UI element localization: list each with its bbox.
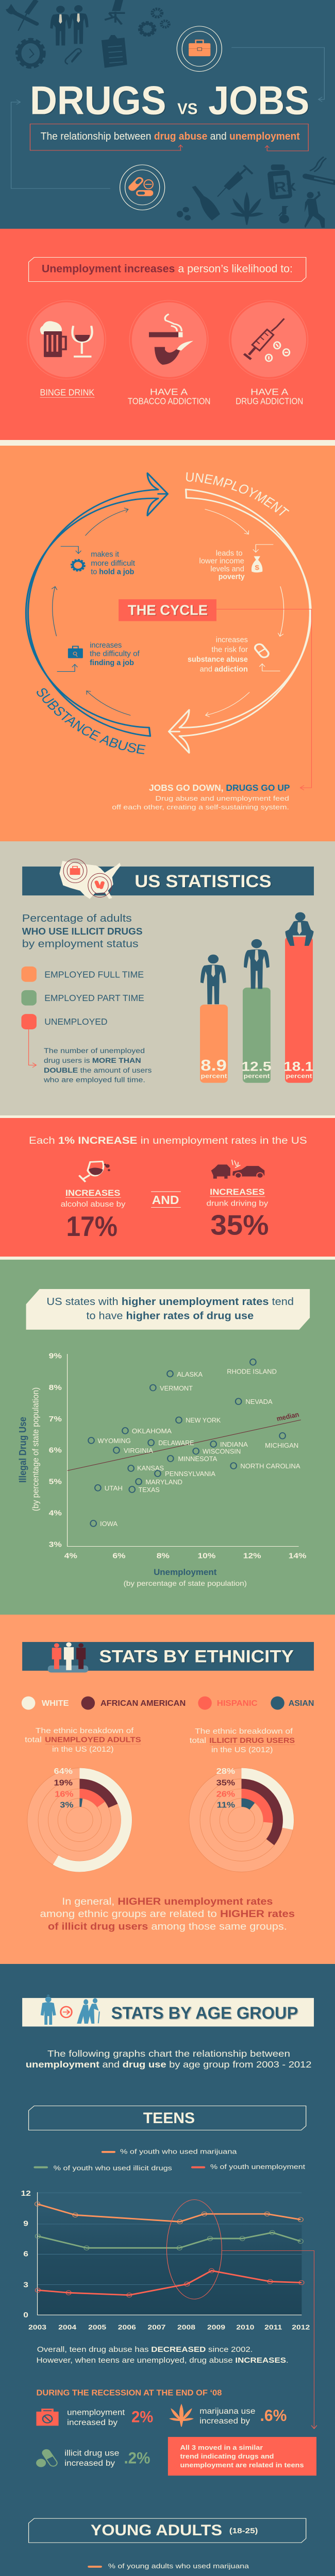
chart: scatter plot: 4% (49, 1509, 62, 1517)
callout: US states banner (26, 1289, 310, 1330)
text: intro: The following graphs chart the relationship between (47, 2049, 290, 2059)
label: median: median (276, 1411, 300, 1423)
stat: teen marijuana: .6% (260, 2407, 287, 2425)
text block: in general: of illicit drug users among those same groups. (48, 1921, 287, 1932)
label: y axis (17, 1387, 41, 1511)
stat: teen marijuana: marijuana use (199, 2406, 255, 2415)
chart: scatter plot: MICHIGAN (265, 1442, 298, 1449)
subtitle box: The relationship between drug abuse and unemployment (41, 130, 300, 142)
chart: scatter plot: 14% (289, 1552, 307, 1560)
chart: teens line chart: 2012 (292, 2324, 310, 2331)
callout: US states banner: US states with higher unemployment rates tend (46, 1296, 294, 1308)
stat: teen illicit drugs: .2% (124, 2449, 150, 2467)
text: hold a job (71, 550, 136, 576)
text: lower income: lower income (199, 557, 244, 565)
chart: unemployed adults rings: 3% (60, 1801, 74, 1809)
callout: US states banner: to have higher rates of drug use (86, 1310, 254, 1321)
text: lower income (199, 549, 262, 581)
heading: each 1 percent: Each 1% INCREASE in unemployment rates in the US (29, 1135, 307, 1146)
stat: drunk driving: drunk driving by (206, 1199, 269, 1208)
legend: employment status (21, 967, 144, 1029)
text: illicit drug users heading: The ethnic breakdown of (195, 1727, 293, 1736)
chart: teens line chart: 2009 (207, 2324, 225, 2331)
text block: in general: In general, HIGHER unemployment rates (62, 1896, 273, 1907)
legend: teens: % of youth who used marijuana (120, 2148, 237, 2156)
title (30, 78, 309, 123)
text: substance abuse risk: and addiction (200, 665, 248, 673)
legend: employment status: UNEMPLOYED (44, 1018, 108, 1027)
stat: teen unemployment: unemployment (67, 2408, 125, 2417)
icon: drugs cluster: Rx (273, 177, 297, 196)
bar chart: drug use by employment (200, 912, 314, 1083)
arrows inner (53, 509, 284, 715)
text: jobs go down: Drug abuse and unemployment feed (155, 795, 289, 803)
heading: stats by ethnicity: STATS BY ETHNICITY (99, 1646, 294, 1666)
chart: unemployed adults rings (27, 1767, 132, 1872)
text: substance abuse risk (188, 636, 270, 673)
stat: teen unemployment: increased by (67, 2418, 118, 2427)
chart: scatter plot: UTAH (105, 1484, 123, 1492)
chart: scatter plot: WYOMING (97, 1437, 131, 1445)
callout: the cycle (119, 599, 311, 788)
chart: illicit drug users rings: 35% (216, 1778, 235, 1787)
chart: scatter plot: 4% (64, 1552, 77, 1560)
panel: US statistics (21, 859, 314, 1084)
text: illicit drug users heading: in the US (2012) (211, 1745, 273, 1754)
text: unemployed adults heading: UNEMPLOYED ADULTS (45, 1736, 141, 1744)
callout: teens (168, 2437, 316, 2476)
bar chart: drug use by employment: percent (286, 1073, 312, 1079)
chart: scatter plot: 10% (197, 1552, 215, 1560)
icon: binge drink: BINGE DRINK (40, 388, 94, 398)
heading: teens: TEENS (143, 2109, 195, 2126)
heading: US statistics banner (22, 859, 314, 899)
label: y axis: Illegal Drug Use (17, 1417, 28, 1483)
chart: illicit drug users rings: 28% (216, 1767, 235, 1776)
chart: scatter plot: 8% (157, 1552, 170, 1560)
chart: scatter plot: 3% (49, 1540, 62, 1549)
chart: teens line chart: 3 (23, 2281, 28, 2289)
chart: teens line chart: 0 (23, 2311, 28, 2319)
text: lower income: levels and (210, 565, 244, 573)
stat: teen illicit drugs (36, 2448, 150, 2468)
panel: stats by ethnicity (22, 1642, 314, 1672)
heading: stats by age group: STATS BY AGE GROUP (111, 2003, 298, 2023)
text block: percentage of adults (22, 912, 143, 950)
bar chart: drug use by employment: 18.1 (283, 1059, 313, 1074)
text block: percentage of adults: Percentage of adults (22, 912, 132, 924)
bar chart: drug use by employment: percent (201, 1073, 227, 1079)
chart: unemployed adults rings: 64% (54, 1767, 73, 1776)
text: hold a job: makes it (91, 550, 119, 558)
text: teen summary: However, when teens are unemployed, drug abuse INCREASES. (36, 2356, 289, 2365)
chart: scatter plot: VIRGINIA (124, 1447, 154, 1454)
connector lines (11, 47, 324, 189)
text: finding a job (68, 641, 140, 667)
stat: alcohol abuse: 17% (66, 1211, 118, 1242)
chart: teens line chart: 2011 (264, 2324, 282, 2331)
subtitle box (30, 124, 308, 151)
chart: scatter plot: NORTH CAROLINA (240, 1462, 300, 1470)
text: intro: unemployment and drug use by age group from 2003 - 2012 (26, 2060, 311, 2070)
text: substance abuse risk: substance abuse (188, 655, 248, 664)
text: teen summary (36, 2345, 289, 2365)
text: lower income: poverty (219, 572, 245, 581)
label: x axis: (by percentage of state population) (124, 1580, 247, 1588)
stat: drunk driving: INCREASES (210, 1187, 265, 1197)
panel: likelihood icons (25, 300, 311, 754)
chart: scatter plot: NEW YORK (186, 1416, 221, 1424)
icon: pills rings (120, 165, 165, 210)
icon: drug addiction: DRUG ADDICTION (236, 397, 303, 406)
chart: teens line chart: 6 (23, 2250, 28, 2258)
chart: scatter plot: KANSAS (137, 1464, 164, 1472)
icon: job tools cluster (7, 0, 169, 67)
icon: tobacco addiction: TOBACCO ADDICTION (128, 397, 210, 406)
stat: teen marijuana: increased by (199, 2416, 250, 2425)
callout: teens: trend indicating drugs and (180, 2453, 274, 2460)
chart: scatter plot: WISCONSIN (203, 1448, 241, 1455)
text: jobs go down (112, 783, 290, 811)
text: lower income: leads to (216, 549, 243, 557)
text: unemployed adults heading: The ethnic breakdown of (36, 1726, 134, 1735)
label: y axis: (by percentage of state population) (31, 1387, 41, 1511)
heading: unemployment curved: UNEMPLOYMENT (186, 472, 290, 516)
legend: ethnicity: WHITE (42, 1699, 69, 1708)
stat: teen illicit drugs: increased by (64, 2459, 115, 2468)
heading: young adults (29, 2518, 306, 2543)
text: unemployed adults heading: in the US (2012) (52, 1745, 114, 1754)
callout: more than double: drug users is MORE THAN (44, 1057, 141, 1065)
title: JOBS (208, 78, 309, 123)
stat: alcohol abuse: INCREASES (65, 1188, 120, 1198)
stat: teen illicit drugs: illicit drug use (64, 2449, 119, 2458)
text: illicit drug users heading: total (190, 1736, 206, 1744)
arrow: substance abuse arc (26, 473, 167, 736)
legend: ethnicity: AFRICAN AMERICAN (100, 1699, 186, 1708)
icon: tobacco addiction (128, 300, 210, 406)
text: illicit drug users heading: ILLICIT DRUG USERS (209, 1736, 295, 1744)
text: lower income: $ (255, 564, 259, 572)
icon: drug addiction (229, 300, 308, 406)
bar chart: drug use by employment: 8.9 (200, 1057, 227, 1074)
text: jobs go down: JOBS GO DOWN, DRUGS GO UP (149, 783, 290, 793)
stat: drunk driving (206, 1187, 269, 1241)
chart: scatter plot: 12% (243, 1552, 261, 1560)
heading: teens (29, 2106, 306, 2130)
chart: scatter plot: MINNESOTA (178, 1455, 217, 1463)
text block: in general (40, 1896, 295, 1932)
callout: more than double (29, 1029, 152, 1084)
panel: ethnicity charts (22, 1697, 314, 1932)
chart: illicit drug users rings (189, 1767, 294, 1872)
chart: scatter plot: 6% (49, 1446, 62, 1454)
chart: scatter plot: MARYLAND (145, 1478, 182, 1486)
chart: teens line chart: 2006 (118, 2324, 136, 2331)
chart: unemployed adults rings: 16% (55, 1790, 74, 1799)
chart: scatter plot: IOWA (100, 1520, 118, 1528)
chart: scatter plot: INDIANA (220, 1440, 248, 1448)
text block: percentage of adults: by employment status (22, 938, 139, 950)
label: x axis (124, 1567, 247, 1588)
chart: illicit drug users rings: 11% (217, 1801, 235, 1809)
text: teen summary: Overall, teen drug abuse has DECREASED since 2002. (37, 2345, 253, 2354)
callout: more than double: DOUBLE the amount of users (44, 1066, 152, 1074)
legend: ethnicity: HISPANIC (217, 1699, 258, 1708)
icon: tobacco addiction: HAVE A (150, 387, 188, 397)
text: hold a job: to hold a job (91, 568, 134, 576)
icon: drug addiction: HAVE A (250, 387, 289, 397)
icon: binge drink (27, 300, 106, 398)
icon: briefcase rings (177, 26, 222, 72)
heading: substance abuse curved: SUBSTANCE ABUSE (37, 688, 145, 754)
panel: stats by age group (21, 1994, 314, 2429)
text block: in general: among ethnic groups are related to HIGHER rates (40, 1908, 295, 1919)
text: finding a job: the difficulty of (90, 650, 140, 658)
callout: the cycle: THE CYCLE (128, 603, 208, 618)
callout: likelihood banner: Unemployment increases a person’s likelihood to: (42, 262, 293, 275)
text: intro (26, 2049, 311, 2070)
hero panel (7, 0, 335, 281)
chart: scatter plot: DELAWARE (158, 1439, 194, 1447)
callout: more than double: The number of unemployed (44, 1047, 145, 1055)
bar chart: drug use by employment: 12.5 (241, 1059, 272, 1074)
heading: recession teens: DURING THE RECESSION AT THE END OF ‘08 (36, 2388, 222, 2397)
stat: teen marijuana (169, 2404, 287, 2427)
text: substance abuse risk: increases (216, 636, 248, 644)
stat: teen unemployment: 2% (131, 2408, 153, 2426)
text: jobs go down: off each other, creating a self-sustaining system. (112, 804, 289, 811)
icon: drugs cluster (177, 157, 335, 228)
chart: teens line chart: 2010 (236, 2324, 254, 2331)
icon: spilled wine (79, 1161, 110, 1182)
chart: teens line chart: 2005 (88, 2324, 106, 2331)
chart: scatter plot: ALASKA (177, 1370, 203, 1378)
title: DRUGS (30, 78, 166, 123)
text: finding a job: finding a job (90, 658, 134, 667)
legend: young adults: % of young adults who used marijuana (108, 2563, 249, 2570)
chart: scatter plot (17, 1352, 307, 1588)
chart: scatter plot: 8% (49, 1383, 62, 1392)
callout: teens: unemployment are related in teens (180, 2462, 304, 2469)
legend: ethnicity: ASIAN (289, 1699, 314, 1708)
chart: scatter plot: OKLAHOMA (132, 1427, 172, 1435)
chart: illicit drug users rings: 26% (216, 1790, 235, 1799)
legend: employment status: EMPLOYED PART TIME (44, 994, 144, 1004)
heading: young adults: (18-25) (229, 2527, 258, 2535)
heading: US statistics banner: US STATISTICS (135, 871, 272, 891)
callout: likelihood banner (29, 257, 306, 281)
chart: teens line chart: 2004 (58, 2324, 77, 2331)
panel: cycle lower (68, 599, 311, 811)
chart: scatter plot: PENNSYLVANIA (165, 1470, 216, 1478)
chart: teens line chart (21, 2189, 314, 2429)
chart: teens line chart: 2008 (177, 2324, 195, 2331)
chart: the cycle (25, 472, 311, 754)
text block: percentage of adults: WHO USE ILLICIT DRUGS (22, 926, 143, 937)
arrow: unemployment arc (169, 489, 311, 753)
text: unemployed adults heading: total (25, 1736, 42, 1744)
bar chart: drug use by employment: percent (243, 1073, 270, 1079)
stat: teen unemployment (36, 2408, 153, 2427)
text: hold a job: more difficult (91, 559, 136, 568)
legend: employment status: EMPLOYED FULL TIME (44, 970, 144, 980)
text: and: AND (152, 1194, 179, 1207)
chart: scatter plot: 6% (112, 1552, 126, 1560)
legend: teens (35, 2148, 305, 2172)
chart: scatter plot: RHODE ISLAND (227, 1368, 277, 1375)
label: x axis: Unemployment (154, 1567, 216, 1577)
stat: alcohol abuse (61, 1188, 126, 1242)
chart: teens line chart: 12 (21, 2189, 31, 2197)
chart: scatter plot: NEVADA (245, 1398, 273, 1405)
stat: alcohol abuse: alcohol abuse by (61, 1200, 126, 1209)
chart: scatter plot: TEXAS (139, 1486, 160, 1494)
chart: scatter plot: 9% (49, 1352, 62, 1360)
chart: scatter plot: 5% (49, 1478, 62, 1486)
chart: scatter plot: 7% (49, 1415, 62, 1423)
text: illicit drug users heading (190, 1727, 295, 1754)
chart: teens line chart: 2007 (147, 2324, 165, 2331)
legend: ethnicity (22, 1697, 314, 1710)
heading: stats by age group (22, 1994, 314, 2026)
chart: teens line chart: 2003 (28, 2324, 46, 2331)
heading: stats by ethnicity (22, 1642, 314, 1672)
panel: one percent increase (17, 1135, 310, 1588)
heading: young adults: YOUNG ADULTS (91, 2522, 222, 2539)
chart: scatter plot: VERMONT (160, 1384, 193, 1392)
text: finding a job: increases (90, 641, 122, 649)
panel: teens details (29, 2345, 316, 2543)
icon: car crash (211, 1160, 264, 1179)
callout: more than double: who are employed full time. (43, 1076, 145, 1084)
chart: teens line chart: 9 (23, 2219, 28, 2228)
stat: drunk driving: 35% (210, 1209, 269, 1241)
title: VS (177, 100, 197, 118)
callout: teens: All 3 moved in a similar (180, 2444, 263, 2452)
legend: teens: % of youth who used illicit drugs (54, 2164, 172, 2172)
text: unemployed adults heading (25, 1726, 141, 1754)
text: substance abuse risk: the risk for (211, 646, 248, 654)
chart: unemployed adults rings: 19% (54, 1778, 73, 1787)
legend: teens: % of youth unemployment (210, 2163, 305, 2171)
